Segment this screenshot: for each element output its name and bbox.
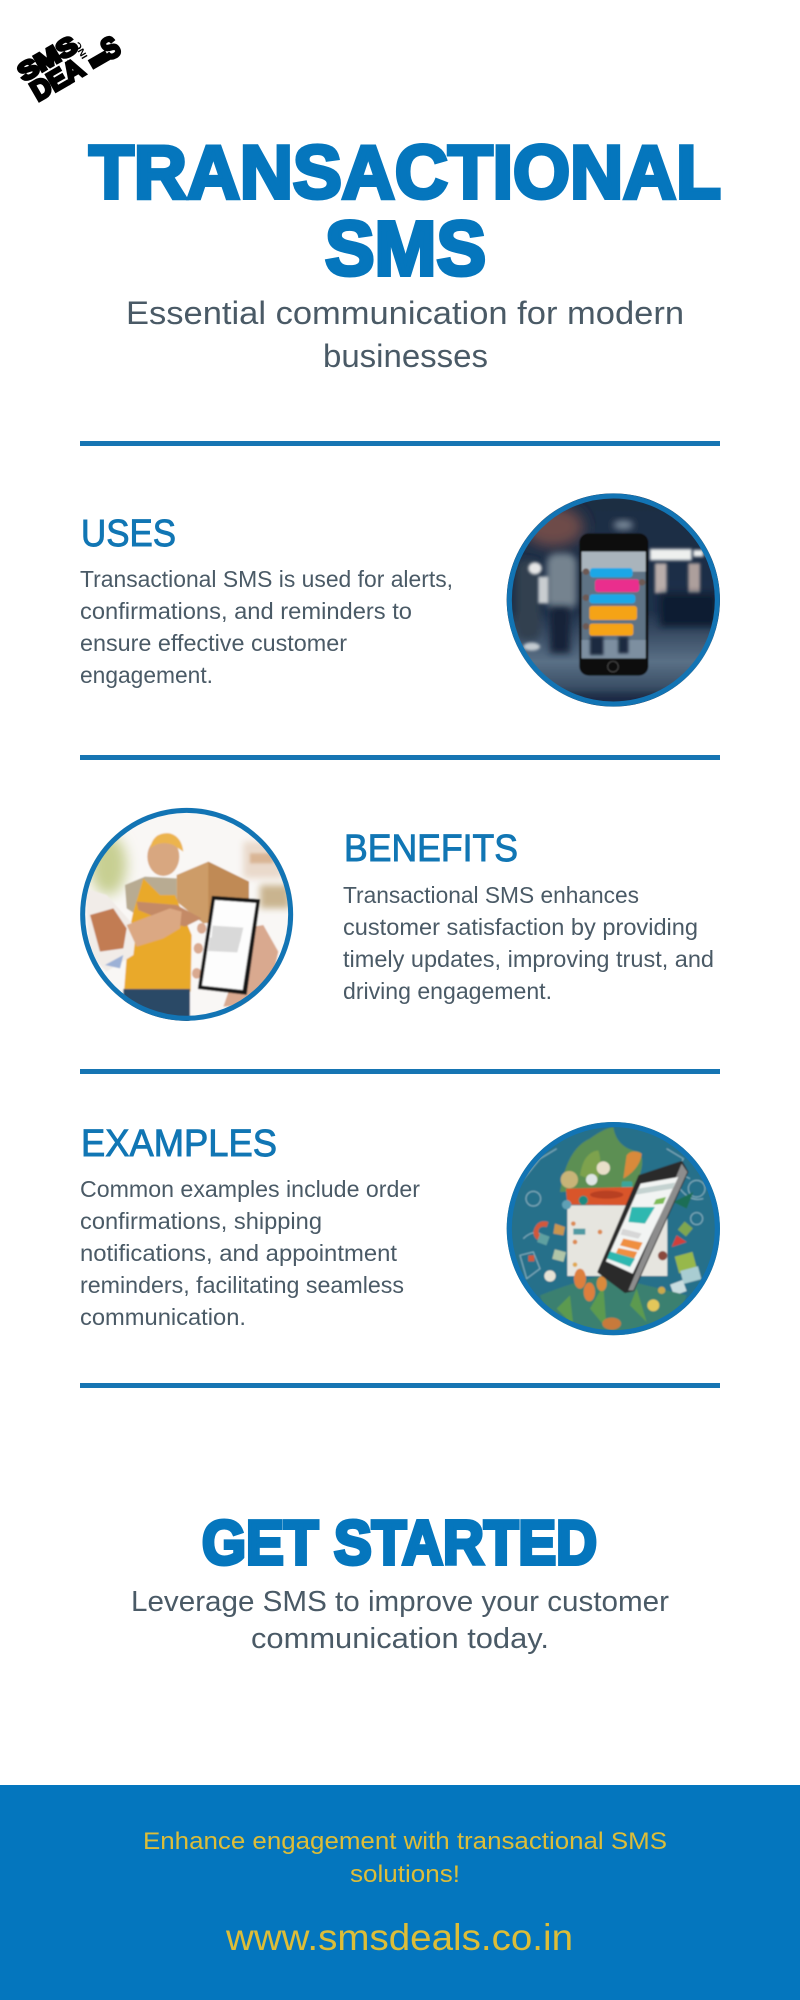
panel: uses <box>80 490 723 710</box>
image: calendar, phone and plants <box>503 1119 723 1342</box>
right icons <box>672 1235 687 1247</box>
subtitle <box>126 295 684 374</box>
footer tagline <box>143 1828 667 1888</box>
heading: examples: EXAMPLES <box>81 1123 277 1165</box>
text block: examples: Common examples include order <box>80 1176 420 1202</box>
text block: examples: notifications, and appointment <box>80 1240 398 1266</box>
panel: examples <box>80 1119 723 1342</box>
call to action text: Leverage SMS to improve your customer <box>131 1586 669 1618</box>
text block: uses: ensure effective customer <box>80 630 347 656</box>
title <box>89 130 721 292</box>
subtitle: businesses <box>323 338 488 374</box>
plants bottom <box>540 1275 687 1335</box>
footer url: www.smsdeals.co.in <box>225 1917 573 1958</box>
text block: uses: engagement. <box>80 662 213 688</box>
text block: uses: Transactional SMS is used for alerts, <box>80 566 453 592</box>
box <box>176 861 210 924</box>
text block: benefits: timely updates, improving trust, and <box>343 946 714 972</box>
logo: SMS <box>13 31 82 87</box>
logo: INC <box>72 40 90 61</box>
text block: examples <box>80 1176 420 1330</box>
logo <box>13 13 126 109</box>
heading: uses: USES <box>81 513 176 555</box>
text block: examples: communication. <box>80 1304 246 1330</box>
left icons <box>533 1221 548 1242</box>
text block: benefits: driving engagement. <box>343 978 552 1004</box>
call to action text: communication today. <box>251 1623 549 1655</box>
title: SMS <box>325 206 486 292</box>
subtitle: Essential communication for modern <box>126 295 684 331</box>
panel: footer <box>0 1785 800 2000</box>
image: delivery man and phone <box>77 805 303 1026</box>
logo: DEA <box>25 52 89 107</box>
phone <box>579 533 648 676</box>
logo: S <box>96 30 126 67</box>
plants top <box>560 1127 642 1192</box>
image: phone in busy station <box>503 490 723 710</box>
hand <box>223 925 278 1007</box>
text block: examples: confirmations, shipping <box>80 1208 322 1234</box>
text block: examples: reminders, facilitating seamless <box>80 1272 404 1298</box>
heading: benefits: BENEFITS <box>344 828 518 870</box>
call to action text <box>131 1586 669 1655</box>
text block: benefits: Transactional SMS enhances <box>343 882 639 908</box>
panel: benefits <box>77 805 714 1026</box>
customer <box>85 888 137 972</box>
heading: get started: GET STARTED <box>202 1509 597 1578</box>
text block: benefits <box>343 882 714 1004</box>
text block: uses: confirmations, and reminders to <box>80 598 412 624</box>
calendar <box>567 1205 667 1276</box>
phone <box>598 1162 687 1292</box>
phone <box>199 897 259 994</box>
footer tagline: solutions! <box>350 1861 460 1888</box>
footer tagline: Enhance engagement with transactional SMS <box>143 1828 667 1855</box>
title: TRANSACTIONAL <box>89 130 721 214</box>
chat bubbles <box>590 568 633 577</box>
text block: benefits: customer satisfaction by providing <box>343 914 698 940</box>
text block: uses <box>80 566 453 688</box>
sketches <box>518 1149 705 1279</box>
man <box>125 877 177 915</box>
